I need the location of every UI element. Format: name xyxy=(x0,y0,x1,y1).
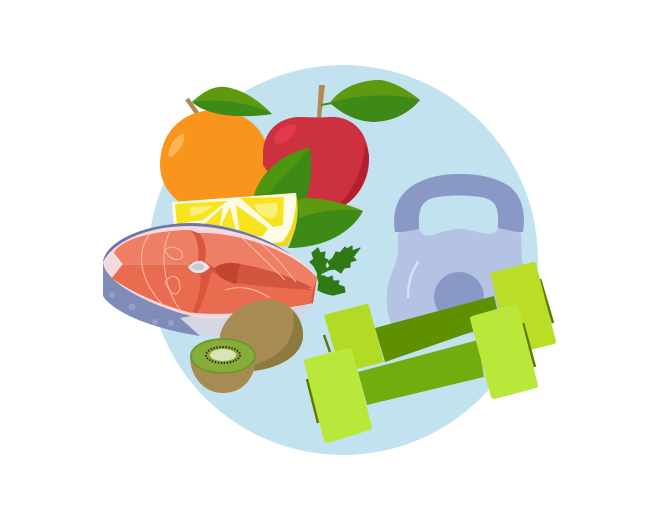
icon: orange xyxy=(160,87,272,215)
salmon skin side xyxy=(103,262,317,336)
icon: salmon steak xyxy=(103,223,317,336)
icon: middle leaf xyxy=(254,148,311,205)
icon: front dumbbell xyxy=(304,304,538,443)
salmon flesh xyxy=(112,230,317,314)
icon: back dumbbell xyxy=(324,262,556,373)
icon: right leaf xyxy=(288,198,363,248)
salmon pale side xyxy=(180,295,312,336)
whole kiwi xyxy=(220,300,303,371)
salmon bone xyxy=(188,261,210,273)
background circle xyxy=(148,65,538,455)
halved kiwi xyxy=(190,356,256,393)
icon: kiwi xyxy=(190,300,303,393)
icon: kettlebell xyxy=(387,174,526,340)
icon: parsley xyxy=(310,246,360,295)
icon: apple xyxy=(263,80,420,205)
salmon top rim xyxy=(103,223,317,318)
icon: lemon wedge xyxy=(172,193,298,250)
